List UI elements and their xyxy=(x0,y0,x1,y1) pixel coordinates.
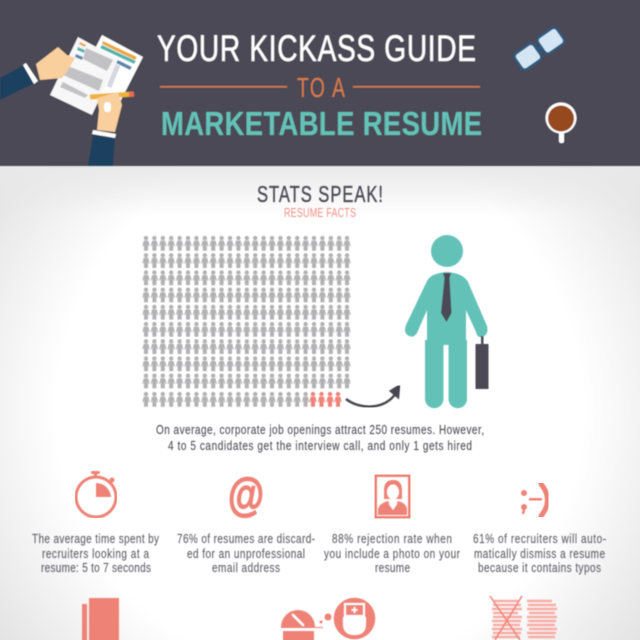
icon: resume book xyxy=(82,598,119,640)
stat text: typos: matically dismiss a resume xyxy=(474,548,605,561)
icon: stopwatch xyxy=(76,471,116,517)
stat text: photo: 88% rejection rate when xyxy=(332,533,452,546)
stat text: average time: recruiters looking at a xyxy=(42,548,150,561)
icon: crossed out text xyxy=(490,596,557,640)
stat text: email address: 76% of resumes are discard- xyxy=(177,533,315,546)
header banner xyxy=(0,0,640,166)
subheading: resume facts: RESUME FACTS xyxy=(284,207,356,220)
stat text: average time xyxy=(32,533,159,575)
stat text: typos xyxy=(473,533,606,575)
stat text: typos: 61% of recruiters will auto- xyxy=(473,533,606,546)
icon: resume photo xyxy=(376,476,410,518)
icon: coffee cup xyxy=(546,102,576,143)
title line 3: MARKETABLE RESUME xyxy=(161,105,482,143)
stat text: average time: The average time spent by xyxy=(32,533,159,546)
stat text: photo: resume xyxy=(375,562,410,575)
stat text: email address: ed for an unprofessional xyxy=(187,548,305,561)
title line 1: YOUR KICKASS GUIDE xyxy=(157,27,476,69)
stat text: email address xyxy=(177,533,315,575)
icon: glasses xyxy=(513,26,566,71)
arrow to hired person xyxy=(346,386,399,407)
pictogram: 250 resumes xyxy=(142,236,351,407)
stat text: email address: email address xyxy=(212,562,280,575)
icon: mechanic and nurse xyxy=(281,598,375,640)
intro text xyxy=(156,424,484,453)
icon: at sign: @ xyxy=(228,468,264,520)
stat text: typos: because it contains typos xyxy=(478,562,601,575)
title line 2: TO A xyxy=(297,74,345,104)
heading: stats speak: STATS SPEAK! xyxy=(257,182,383,208)
figure: hired candidate xyxy=(405,235,488,408)
illustration: hands holding resume xyxy=(0,35,143,166)
intro text: On average, corporate job openings attract 250 resumes. However, xyxy=(156,424,484,437)
stat text: average time: resume: 5 to 7 seconds xyxy=(41,562,151,575)
decorative rule left xyxy=(160,86,287,88)
intro text: 4 to 5 candidates get the interview call, and only 1 gets hired xyxy=(168,440,472,453)
stat text: photo: you include a photo on your xyxy=(324,548,460,561)
icon: winking emoticon xyxy=(521,484,548,516)
stat text: photo xyxy=(324,533,460,575)
